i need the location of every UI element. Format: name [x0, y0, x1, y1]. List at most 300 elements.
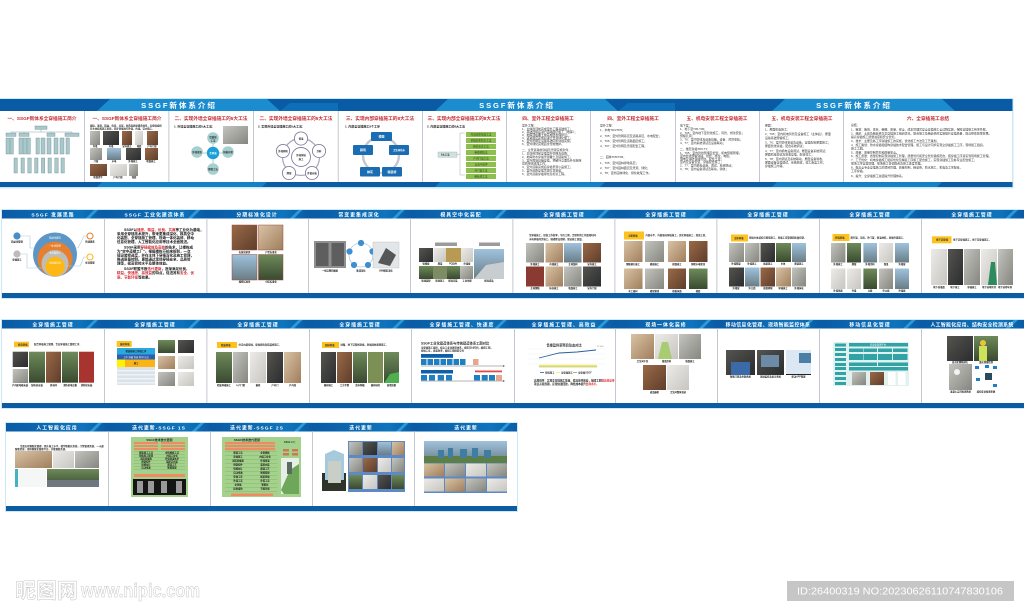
- body paragraphs: 质、节能环保等效果。: [117, 274, 152, 280]
- panel: schedule table: [117, 322, 194, 386]
- body text: 4、T7：室内机电设备调试，屋面设备系统调试；: [765, 148, 828, 153]
- right icons: 快速建造: [85, 239, 95, 243]
- panel: development concept: [11, 212, 95, 277]
- panel: landscape management: [321, 322, 399, 387]
- ring labels: 涂料: [317, 149, 322, 153]
- body text: 3、室外围墙基础穿插，预留外立面及外架拆除: [522, 158, 582, 162]
- green method list: 抗裂砂浆防水工法: [471, 138, 492, 142]
- panel: eight methods list: [427, 115, 501, 179]
- floor plan drawing: 一张完整的图纸: [322, 268, 339, 272]
- board row 3: management and information: [1, 319, 1024, 409]
- photo grid: 室内施工: [587, 262, 597, 266]
- panel: MEP works 2: [765, 115, 833, 168]
- photo grid: 地面施工: [146, 159, 156, 163]
- concentric circles diagram: 精益化建造: [49, 236, 61, 240]
- panel: five exterior wall methods cross diagram: [174, 115, 248, 175]
- watermark: site logo: [15, 575, 200, 605]
- title: 移动信息化管理: [849, 322, 891, 328]
- green chart board: SSGF技术迭代更新: [234, 437, 260, 442]
- green chart board: 高精度楼面: [140, 456, 152, 460]
- photo grid: 外立面: [749, 286, 756, 290]
- panel: mobile information system: [833, 322, 909, 386]
- description: 绿植、地下室管线穿插，穿插园林景观施工。: [340, 342, 388, 346]
- photo grid: 结构安全检测系统: [977, 390, 996, 394]
- green chart board: [222, 437, 301, 497]
- panel: AI and structural inspection: [930, 322, 1014, 394]
- green chart board: 节能环保: [260, 486, 270, 490]
- photo grid: 外墙涂料: [865, 262, 875, 266]
- green chart board: 外墙工法: [233, 478, 243, 482]
- photo grid: 立面: [868, 288, 873, 292]
- green chart board: SSGF 2.0：: [284, 441, 297, 444]
- title: 全穿插施工管理: [543, 212, 585, 218]
- panel: iteration community view: [424, 424, 507, 493]
- photo grid: 自动化钢筋绑扎: [952, 360, 969, 364]
- ring labels: 外墙砌筑: [278, 149, 288, 153]
- body text: 9、提升：全穿插施工总结提升管理体系。: [851, 173, 905, 178]
- body text: 7、工艺优化：机电穿插施工组织优化及精装工序施工配合施工，实现穿插施工及各专业配合施工；: [851, 157, 977, 162]
- right icons: [85, 233, 95, 264]
- cross diagram: 全穿插: [209, 151, 217, 155]
- green chart board: 爬架施工工法: [139, 450, 154, 454]
- green chart board: 自动喷淋: [141, 466, 151, 470]
- heading: 五、机电安装工程全穿插施工: [687, 115, 748, 122]
- body paragraphs: 铺设装修进度，并在主体下穿插深化及施工管理，: [117, 252, 194, 258]
- green chart board: 爬架工艺: [260, 466, 270, 470]
- heading: 四、室外工程全穿插施工: [522, 115, 574, 122]
- line chart: 37.84%: [597, 346, 604, 348]
- header band: [2, 320, 1024, 328]
- title: 模具空中化装配: [440, 212, 482, 218]
- body text: 室内管线预留穿插，线管，桥架，电缆；: [680, 153, 732, 158]
- process ring: [353, 132, 409, 176]
- green chart board: 自动喷淋: [233, 470, 243, 474]
- cross diagram: 外墙保温: [192, 150, 202, 154]
- body text: 2、T7：室内机电设备，调试，系统联动；: [680, 162, 734, 168]
- photo grid: 模板施工: [650, 262, 660, 266]
- line chart: 传统施工: [545, 370, 555, 374]
- photo grid: [624, 241, 708, 293]
- conclusion text: 高周转率：实现全穿插施工质量、提高效率效益，缩短工期提高收益率: [534, 378, 615, 382]
- photo grid: 配电室安装: [31, 383, 43, 387]
- photo grid: 楼层施工: [763, 262, 773, 266]
- panel: management 3: [729, 212, 806, 290]
- body text: 穿插施工内容。: [765, 163, 785, 168]
- title: 全穿插施工管理、快速度: [430, 322, 494, 328]
- body paragraphs: SSGF以速度、精益、优良、共赢等工业化为基础，: [124, 227, 204, 232]
- panel: formwork assembly: [419, 212, 504, 282]
- photo grid: 墙面施工: [685, 359, 695, 363]
- header band with three titles: SSGF新体系介绍: [816, 100, 892, 110]
- yellow tag: 园林穿插: [325, 343, 335, 347]
- body text: 2、T05：室内地下室管线施工，风管、桥架安装；: [680, 130, 744, 135]
- title: 全穿插施工管理: [32, 322, 74, 328]
- body text: 3、T8：室外园林绿化、绿化收尾工作。: [600, 170, 651, 175]
- photo grid: 钢筋绑扎施工: [626, 262, 641, 266]
- body text: [765, 122, 831, 168]
- photo grid: 户型标准化: [265, 250, 277, 254]
- header band: [2, 210, 1024, 218]
- photo strip: 地下室墙面: [933, 285, 945, 289]
- yellow tag: 土建穿插: [628, 234, 638, 238]
- green chart board: 铝模拉片: [141, 462, 151, 466]
- cross diagram: 工法: [211, 138, 216, 142]
- photo grid: 内墙: [109, 144, 114, 148]
- sub heading: 1. 内部全穿插施工8个工序: [345, 124, 380, 128]
- board row 2: development concept and management: [1, 209, 1024, 299]
- description: 配合穿插施工管理，专业穿插施工管理工序。: [34, 342, 82, 346]
- image id stamp: [787, 581, 1014, 601]
- heading: 三、实现内部穿插施工的8大工法: [346, 115, 414, 122]
- title: 迭代更新: [454, 424, 478, 432]
- green chart board: 穿插施工管理: [139, 454, 154, 458]
- photo grid: 户内门窗: [147, 144, 157, 148]
- photo grid: 楼层砌筑: [763, 286, 773, 290]
- chart title: SSGF工业化建造体系与传统建造体系工期对比: [421, 341, 490, 346]
- panel: summary: [851, 115, 991, 178]
- photo grid: 外墙施工: [747, 262, 757, 266]
- yellow tag: 精装穿插: [221, 343, 231, 347]
- body text: 5、室外管网及设备基础同步穿插实施；: [522, 138, 573, 143]
- intro text: 围绕、速度、精益、优良、共赢，创造高质量建造体系，全穿插组织: [90, 124, 162, 128]
- body text: 4、T07：室外管网及景观配套工程；: [600, 143, 647, 148]
- left icons: 穿插施工: [12, 257, 22, 261]
- body text: 屋面：: [765, 122, 774, 128]
- left icons: 精益化管理: [11, 239, 23, 243]
- photo strip: 户内墙: [289, 383, 297, 387]
- monitoring photos: 现场监控及显示系统: [760, 374, 782, 378]
- 3D model image: BIM模型深化: [379, 268, 393, 272]
- photo grid: 消防栓安装: [81, 383, 93, 387]
- body text: 1、屋面机电施工：: [765, 126, 790, 132]
- photo grid: 外墙窗: [899, 262, 906, 266]
- photo grid: 外墙饰面: [833, 288, 843, 292]
- body text: [600, 122, 662, 175]
- image id stamp: ID:26400319 NO:20230626110747830106: [797, 586, 1003, 598]
- photo grid: 爬架施工: [794, 262, 804, 266]
- photo strip: 地下室地坪漆: [982, 285, 997, 289]
- body text: 地下室：: [680, 122, 692, 128]
- body text: 2、T05：室外管网基层及道路基层，水电配套；: [600, 133, 662, 138]
- ring labels: 外窗安装: [307, 171, 317, 175]
- photo strip: [321, 352, 399, 387]
- photo grid: 外墙面: [899, 288, 906, 292]
- description: 全穿插施工，提高工作效率，节约工期，合理利用工作面和时间: [529, 233, 597, 237]
- footer band: [2, 293, 1024, 298]
- body paragraphs: SSGF联盟不断迭代更新，逐渐满足优良、: [124, 266, 190, 271]
- green chart board: 智能管理: [260, 470, 270, 474]
- panel: system intro org chart: [6, 115, 79, 173]
- title: 全穿插施工管理: [237, 322, 279, 328]
- board row 1: SSGF new system introduction: [0, 98, 1014, 188]
- body text: 施工工期。: [851, 146, 865, 150]
- yellow tag: 装修穿插: [120, 342, 130, 346]
- body text: 1、T05：室内管线预埋及套管，机电预留预埋；: [680, 150, 742, 155]
- heading: 五、机电安装工程全穿插施工: [772, 115, 833, 122]
- body text: [680, 122, 744, 171]
- panel: industrial construction system: [117, 212, 204, 280]
- body text: 5、质量：质量控制管控和质量安全。: [851, 150, 899, 154]
- photo grid: 楼面施工: [672, 262, 682, 266]
- org chart: [6, 126, 79, 173]
- body text: 室外工程：: [600, 122, 614, 128]
- photo grid: 墙面涂料: [662, 359, 672, 363]
- body paragraphs: 理等，提高管控水平及整体效益。: [117, 260, 170, 266]
- description: [421, 346, 493, 352]
- ring labels: 保温: [299, 136, 304, 140]
- photo strip: [216, 352, 301, 387]
- footer band: [2, 403, 1024, 408]
- body text: 二、全景道路前穿插及景观实施条件：: [522, 147, 571, 152]
- photo strip: 穿插施工: [967, 285, 977, 289]
- intro text: 在主体结构施工阶段，同步穿插进行外墙、内墙、室内施工。: [90, 126, 155, 130]
- heading: 二、实现外墙全穿插施工的5大工法: [260, 115, 333, 122]
- photo grid: [729, 243, 806, 290]
- photo grid: 外墙: [93, 144, 98, 148]
- green chart board: 外窗工法: [260, 478, 270, 482]
- green chart board: 爬架工艺: [167, 462, 177, 466]
- ring labels: 爬架: [287, 171, 292, 175]
- photo grid: [90, 131, 158, 179]
- panel: integrated renovation: [631, 322, 701, 394]
- green method list: 内墙轻质隔墙工法: [471, 132, 492, 136]
- panel: smart monitoring: [726, 322, 811, 378]
- photo grid: 室内施工: [122, 144, 132, 148]
- photo grid: 卫生间干区: [637, 359, 649, 363]
- photo grid: [831, 243, 909, 292]
- watermark: site logo: 昵图网: [15, 575, 78, 605]
- system diagram: 信息化管理平台: [870, 343, 887, 347]
- body text: 2、组织：土建及精装修交叉穿插施工组织优化，配合施工及精装修的实施提升穿插质量，提高整体效率效果。: [851, 130, 991, 136]
- body text: 2、T07：室外园林面层及景观、绿化；: [600, 165, 650, 170]
- body paragraphs: SSGF采用穿插提效及高效的技术，让楼栋成: [124, 244, 194, 250]
- title: SSGF 发展思路: [31, 212, 75, 218]
- footer band: [6, 506, 517, 511]
- photo grid: 主体结构: [568, 262, 578, 266]
- panel: AI application: [15, 424, 104, 487]
- photo collage: [15, 451, 99, 487]
- photo grid: [158, 340, 194, 386]
- heading: 一、SSGF新体系全穿插施工简介: [7, 115, 77, 122]
- body text: 1、策划：策划、体系、精细、质量、安全、成本管理贯穿全穿插施工全过程实施，保障穿插施工有序开展。: [851, 126, 988, 132]
- body text: 二、楼层穿插TD5-T1：: [680, 146, 710, 151]
- green chart board: 全穿插: [235, 482, 242, 486]
- green chart board: 装配式内装: [166, 460, 178, 464]
- body text: 4、道路面层完成后进行景观绿化施工；: [522, 135, 573, 140]
- header band with three titles: SSGF新体系介绍: [479, 100, 555, 110]
- photo collage: 模具成品: [484, 278, 494, 282]
- photo grid: 地面找平: [93, 175, 103, 179]
- photo grid: 穿插施工: [778, 286, 788, 290]
- body text: 室外工程：: [522, 122, 536, 128]
- body text: 4、室外道路完成后穿插景观小品施工；: [522, 164, 573, 169]
- photo grid: 预埋水电管线: [691, 262, 706, 266]
- photo grid: 保温: [884, 262, 889, 266]
- photo strip: 地下施工: [950, 285, 960, 289]
- intro text: [90, 124, 162, 130]
- green chart board: 外墙保温体系: [165, 456, 180, 460]
- green method list: 户内门窗工法: [473, 156, 489, 160]
- photo strip: 地下室停车场: [998, 285, 1013, 289]
- body paragraphs: 为“空中造楼工厂”。根据楼栋节拍来规划，一次: [117, 248, 191, 254]
- green method list: 外门窗工法: [475, 168, 488, 172]
- body paragraphs: 精益、快速度、高效益的特点，促进其有安全、优: [117, 270, 194, 275]
- panel: management 1: [526, 212, 601, 290]
- body text: 1、地下室T05-T06；: [680, 126, 707, 131]
- photo grid: 楼面: [696, 289, 701, 293]
- description: 全穿插施工组织，结合工业化建造体系，提前交付时间，缩短工期，: [421, 346, 493, 350]
- monitoring photos: [726, 350, 811, 378]
- cross diagram: 铝模板: [209, 135, 217, 139]
- photo grid: 户内配电箱安装: [12, 383, 29, 387]
- photo collage: 现场装配: [421, 278, 431, 282]
- green chart board: 全铝模板工法: [165, 450, 180, 454]
- heading: 二、实现外墙全穿插施工的5大工法: [175, 115, 248, 122]
- photo grid: 爬架: [852, 262, 857, 266]
- ring labels: [278, 136, 322, 175]
- photo strip: 土方平整: [340, 383, 350, 387]
- photo grid: 成品橱柜: [650, 390, 660, 394]
- sub heading: 1. 外墙全穿插施工的5大工法：: [174, 124, 215, 128]
- body text: 3、T8：室内设备调试及联动，验收；: [680, 166, 728, 171]
- description: 全面实现智能化管理，提升施工水平，楼宇智能化系统，门禁管理系统，一卡通: [20, 444, 104, 448]
- board row 4: iterative updates: [5, 422, 518, 512]
- photo grid: 外墙施工: [128, 159, 138, 163]
- photo strip: 入户门框: [236, 383, 246, 387]
- body text: 4、施工策划：防水穿插和结构穿插技术配合管理，施工与设计同步实现全穿插施工工序，现场施工组织。: [851, 142, 986, 147]
- photo collage: 爬架: [438, 262, 443, 266]
- green chart board: 内墙工业化: [166, 454, 178, 458]
- body paragraphs: 推进质量控制。更能通过现场穿插安全、品质管: [117, 256, 191, 262]
- line chart: 全穿插SSGF: [578, 370, 592, 374]
- ring labels: 施工: [299, 157, 304, 161]
- body text: 预留孔洞；: [680, 133, 694, 138]
- photo grid: 混凝土实时检测系统: [950, 390, 972, 394]
- description: 爬升架、涂料、外门窗，保温材料，穿插外墙施工。: [850, 236, 905, 240]
- title: 人工智能化应用、结构安全检测系统: [930, 322, 1014, 328]
- body text: 屋面设备穿插调试，系统验收，竣工备案工作；: [765, 160, 826, 164]
- photo grid: 墙面: [137, 144, 142, 148]
- panel: interior management: [12, 322, 94, 387]
- panel: management 5: [931, 212, 1013, 289]
- photo grid: [631, 334, 701, 394]
- footer band: [0, 182, 1012, 187]
- title: 常变更集成深化: [338, 212, 380, 218]
- green chart board: 楼层穿插: [260, 474, 270, 478]
- heading: 四、室外工程全穿插施工: [607, 115, 659, 122]
- green chart board: 全铝模板: [260, 450, 270, 454]
- photo strip: 景观效果: [387, 383, 397, 387]
- body text: 2、基础回填后进行道路面层施工（地库）；: [522, 129, 577, 134]
- photo grid: 主体钢筋: [530, 286, 540, 290]
- body paragraphs: 信息化管理、人工智能化应用等技术全面推进。: [117, 239, 190, 244]
- photo grid: 外墙窗: [733, 286, 740, 290]
- title: 全穿插施工管理: [645, 212, 687, 218]
- photo strip: 园林绿化: [371, 383, 381, 387]
- photo grid: 抹灰施工: [549, 286, 559, 290]
- panel: management 2: [624, 212, 708, 293]
- photo collage: 工业化模: [462, 278, 472, 282]
- panel: five methods pentagon diagram: [258, 115, 333, 180]
- photo collage: 外墙板: [464, 262, 471, 266]
- green chart board: 高精度楼面: [232, 458, 244, 462]
- panel: system intro photos: [90, 115, 162, 179]
- description: 穿插主体结构与砌筑施工，穿插工序管理和质量控制。: [749, 236, 806, 240]
- line chart: 全穿插施工: [561, 370, 574, 374]
- body text: 提高穿插施工质量进度和安全管控。: [851, 134, 897, 139]
- connectors: [21, 236, 94, 268]
- ring labels: 外墙穿插: [296, 153, 306, 157]
- body text: 5、T8：室内调试及系统联动，屋面设备验收，: [765, 156, 825, 161]
- panel: finishing management: [216, 322, 301, 387]
- title: SSGF 工业化建造体系: [125, 212, 185, 218]
- schedule table: 工序 穿插 内容 时间 节点: [123, 355, 149, 359]
- green method list: 精装修工法: [475, 174, 488, 178]
- panel: iteration SSGF 1S: [131, 424, 188, 497]
- header band with three titles: SSGF新体系介绍: [141, 100, 217, 110]
- photo grid: 机电间: [50, 383, 58, 387]
- body text: 3、技术：主要及各工序穿插施工的实施，优化施工方法及工艺策划。: [851, 138, 939, 143]
- description: 穿插工序，提高效率，缩短工期提前交付: [421, 348, 465, 352]
- title: 全穿插施工管理: [747, 212, 789, 218]
- timeline top: [421, 354, 505, 367]
- body text: 2、T05：室内机电风管及设备施工（主体后），屋面: [765, 131, 831, 136]
- green chart board: 智能管理: [167, 466, 177, 470]
- green chart board: 预制构件: [233, 462, 243, 466]
- photo grid: 主体: [781, 262, 786, 266]
- yellow tag: 地下室穿插: [936, 238, 949, 242]
- yellow tag: 主体穿插: [734, 236, 744, 240]
- concentric circles diagram: [33, 232, 77, 277]
- green chart board: 智能化: [262, 482, 269, 486]
- photo grid: [947, 336, 998, 394]
- title: 迭代更新-SSGF 2S: [230, 424, 284, 432]
- photo grid: 标准化厨房: [239, 250, 251, 254]
- process ring: 抹灰: [367, 169, 373, 174]
- photo grid: 楼层管线: [650, 289, 660, 293]
- integration ring: 集成深化: [356, 268, 366, 272]
- photo strip: 户内门: [272, 383, 279, 387]
- body text: 弱电及消防穿插管线，配合土建；: [680, 156, 723, 161]
- body paragraphs: 化装配、全穿插施工管理、现场一体化装修、移动: [117, 235, 194, 240]
- panel: efficiency chart: [528, 322, 615, 386]
- header band: [6, 423, 517, 432]
- photo grid: [12, 352, 94, 387]
- photo collage: PC构件: [449, 262, 458, 266]
- photo strip: 橱柜: [256, 383, 261, 387]
- panel: speed timeline: [421, 322, 505, 382]
- body text: 工序穿插。: [851, 168, 865, 173]
- sub heading: 2. 实现外墙全穿插施工的5大工法：: [258, 124, 305, 128]
- photo collage: 铝模板: [423, 262, 430, 266]
- body text: [851, 122, 991, 178]
- building image: [322, 450, 346, 491]
- schedule table: 精装修施工穿插工序: [126, 349, 147, 353]
- photo grid: [348, 441, 405, 492]
- heading: 六、全穿插施工总结: [907, 115, 949, 122]
- cross diagram: [191, 132, 234, 175]
- description: [529, 233, 597, 241]
- body text: 6、施工质量：质量控制实现穿插施工管理，质量管控和安全管控措施配合，把穿插工序落实到现场施工管理。: [851, 153, 991, 158]
- photo collage: 模具安装: [448, 278, 458, 282]
- photo grid: 卫生间整体浴室: [670, 390, 687, 394]
- photo grid: [526, 243, 601, 290]
- photo grid: 外墙抹灰: [794, 286, 804, 290]
- header band with three titles: [0, 99, 1012, 111]
- description: 住宅内部穿插，穿插提效及精装修施工。: [238, 342, 282, 346]
- photo grid: [232, 225, 283, 284]
- schedule table: [117, 348, 155, 385]
